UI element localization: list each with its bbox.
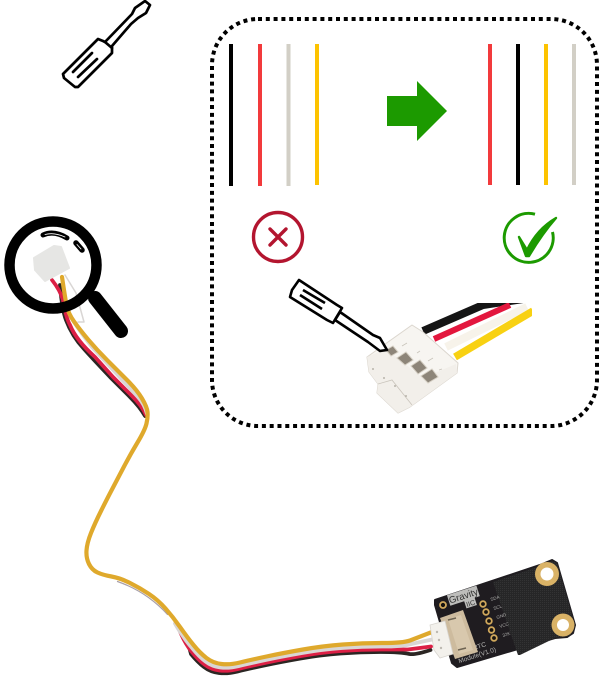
lens highlights xyxy=(43,233,82,250)
board label: Gravity: Gravity xyxy=(448,587,480,607)
icon: check mark xyxy=(504,213,556,262)
icon: cross xyxy=(254,212,302,262)
board label: module name: Module(V1.0) xyxy=(458,646,497,665)
module board xyxy=(435,560,575,667)
pin labels: SCL xyxy=(493,603,503,611)
connector wires xyxy=(423,298,533,357)
connector body xyxy=(367,325,458,413)
connector in lens xyxy=(34,246,69,281)
cable: white strand xyxy=(65,275,432,668)
pin labels: VCC xyxy=(499,621,510,629)
magnifier handle xyxy=(95,298,121,331)
pin labels: SDA xyxy=(490,594,500,602)
cable: black strand xyxy=(60,285,430,673)
board label: module name xyxy=(455,639,497,665)
pin labels: 32K xyxy=(502,631,511,638)
magnifier ring xyxy=(10,222,96,308)
connector photo xyxy=(367,298,533,413)
pin header xyxy=(440,601,497,641)
cable: red strand xyxy=(52,280,431,671)
cable: yellow strand xyxy=(62,277,432,664)
board socket xyxy=(440,610,478,659)
board label: module name: RTC xyxy=(472,641,487,652)
wrong wire order xyxy=(231,44,317,186)
icon: screwdriver xyxy=(63,1,150,87)
connector front face shading xyxy=(367,349,457,413)
sensor module xyxy=(430,560,575,667)
panel: wire order correction xyxy=(212,19,597,426)
module cover xyxy=(493,561,575,655)
board label: I2C xyxy=(464,597,477,609)
connector contact windows xyxy=(386,346,438,383)
mounting holes xyxy=(535,562,574,636)
icon: screwdriver on connector xyxy=(290,280,387,351)
arrow xyxy=(387,81,447,141)
correct wire order xyxy=(490,44,574,185)
board label: I2C: IIC xyxy=(466,600,476,609)
cable xyxy=(52,275,432,673)
connector ridge marks xyxy=(372,343,442,405)
magnifier with connector xyxy=(10,222,121,331)
pin labels: GND xyxy=(496,612,508,620)
pin labels xyxy=(490,594,511,638)
cable plug xyxy=(430,621,453,658)
